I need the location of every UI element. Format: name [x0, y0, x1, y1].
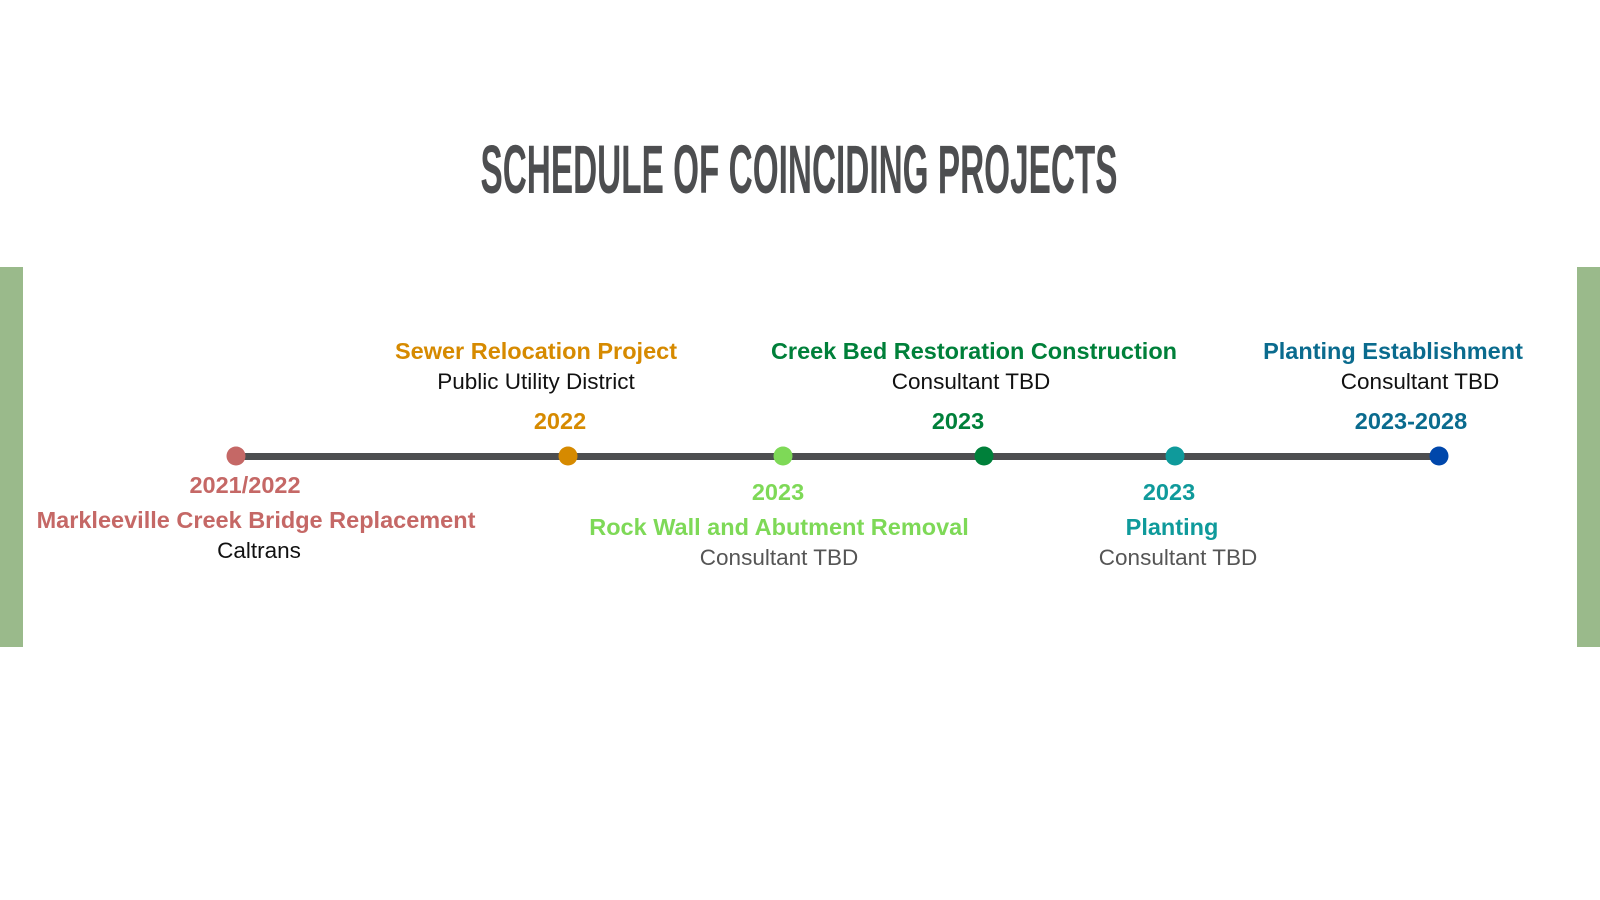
- agency: Public Utility District: [437, 369, 635, 394]
- dot: 2023 creek bed: [974, 446, 994, 466]
- timeline line: [236, 453, 1439, 460]
- heading: Markleeville Creek Bridge Replacement: [37, 507, 475, 533]
- agency: Consultant TBD: [1341, 369, 1499, 394]
- dot: 2023 rock wall: [774, 446, 792, 466]
- dot: 2021/2022: [226, 446, 246, 466]
- agency: Consultant TBD: [892, 369, 1050, 394]
- heading: Rock Wall and Abutment Removal: [589, 514, 969, 540]
- year: 2023: [932, 408, 984, 434]
- year: 2022: [534, 408, 586, 434]
- item: sewer relocation: [395, 338, 677, 434]
- heading: Planting Establishment: [1263, 338, 1523, 364]
- item: rock wall: [589, 479, 969, 570]
- year: 2023-2028: [1355, 408, 1467, 434]
- item: planting establishment: [1263, 338, 1523, 434]
- item: creek bed: [771, 338, 1177, 434]
- year: 2023: [752, 479, 804, 505]
- year: 2021/2022: [189, 472, 301, 498]
- heading: Planting: [1126, 514, 1218, 540]
- title: SCHEDULE OF COINCIDING PROJECTS: [481, 131, 1117, 208]
- agency: Consultant TBD: [700, 545, 858, 570]
- side bar right: [1577, 267, 1600, 647]
- dot: 2022: [558, 446, 578, 466]
- item: planting: [1099, 479, 1257, 570]
- heading: Creek Bed Restoration Construction: [771, 338, 1177, 364]
- year: 2023: [1143, 479, 1195, 505]
- heading: Sewer Relocation Project: [395, 338, 677, 364]
- item: bridge replacement: [37, 472, 476, 563]
- dot: 2023-2028: [1430, 446, 1448, 466]
- side bar left: [0, 267, 23, 647]
- dot: 2023 planting: [1166, 446, 1184, 466]
- agency: Caltrans: [217, 538, 301, 563]
- agency: Consultant TBD: [1099, 545, 1257, 570]
